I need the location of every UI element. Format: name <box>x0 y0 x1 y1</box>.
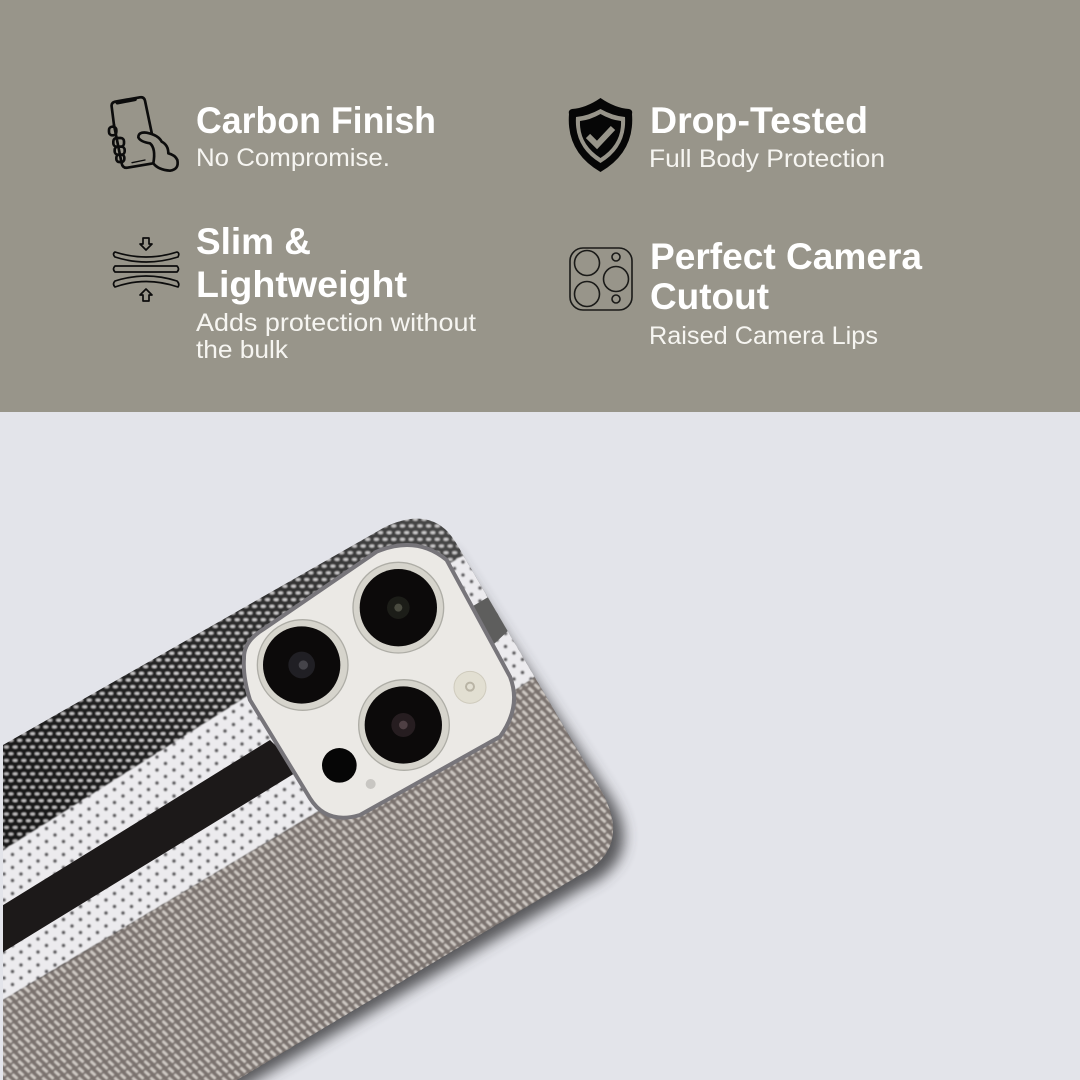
lens left <box>257 620 348 710</box>
heading: Slim &: Slim & <box>196 221 311 262</box>
heading: Cutout: Cutout <box>650 276 769 317</box>
lidar sensor <box>322 748 357 783</box>
dark band sheen <box>3 518 534 850</box>
microphone <box>366 779 376 789</box>
icon: shield with check <box>569 98 632 172</box>
icon: compression layers <box>114 238 179 301</box>
camera island <box>244 545 514 818</box>
flash <box>454 671 486 703</box>
subtext: the bulk: the bulk <box>196 336 289 364</box>
bottom panel background <box>0 412 1080 1080</box>
subtext: Adds protection without: Adds protection without <box>196 309 476 337</box>
feature: perfect camera cutout <box>570 236 922 350</box>
subtext: No Compromise.: No Compromise. <box>196 144 390 172</box>
dark dotted band <box>3 518 614 1080</box>
gray stripe segment <box>474 597 508 644</box>
feature: drop-tested <box>569 98 885 173</box>
lens upper <box>353 562 444 653</box>
feature: carbon finish <box>109 97 436 172</box>
heading: Carbon Finish: Carbon Finish <box>196 100 436 141</box>
icon: hand holding phone <box>109 97 178 171</box>
icon: camera module <box>570 248 632 310</box>
lens lower <box>359 680 449 770</box>
subtext: Full Body Protection: Full Body Protection <box>649 145 885 173</box>
case shadow <box>120 550 624 1080</box>
case body with bands <box>3 518 614 1080</box>
feature: slim and lightweight <box>114 221 476 364</box>
heading: Drop-Tested: Drop-Tested <box>650 100 868 141</box>
black stripe <box>0 740 300 954</box>
phone case photo <box>3 518 634 1080</box>
heading: Lightweight: Lightweight <box>196 264 407 305</box>
carbon weave band <box>3 676 614 1080</box>
subtext: Raised Camera Lips: Raised Camera Lips <box>649 322 878 350</box>
white dotted band <box>3 554 535 1001</box>
heading: Perfect Camera: Perfect Camera <box>650 236 922 277</box>
top panel background <box>0 0 1080 412</box>
